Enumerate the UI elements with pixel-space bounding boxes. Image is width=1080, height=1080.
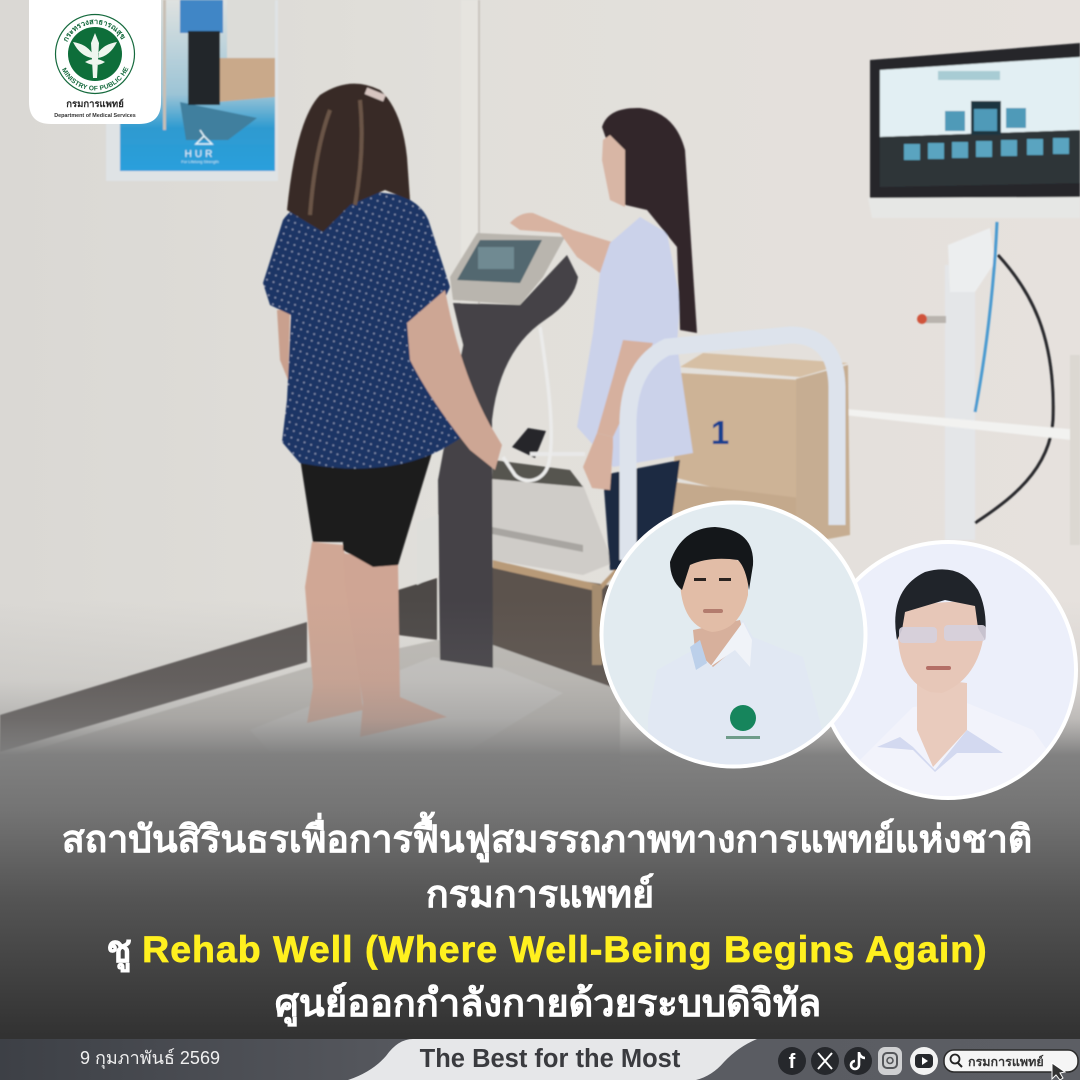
wooden cabinet — [673, 353, 850, 545]
left arm — [277, 310, 290, 380]
ministry seal: กระทรวงสาธารณสุข — [64, 19, 126, 42]
body scanner machine — [438, 233, 578, 668]
baseboard — [0, 622, 307, 752]
shorts — [300, 453, 432, 567]
logo label thai: กรมการแพทย์ — [66, 98, 124, 110]
cursor icon — [1052, 1063, 1065, 1080]
footer bar — [0, 1039, 1080, 1080]
portrait: left — [600, 500, 870, 770]
caduceus emblem — [73, 33, 117, 78]
staff in white uniform — [510, 108, 697, 570]
headline line 3: ชู Rehab Well (Where Well-Being Begins Again) — [106, 928, 988, 970]
social icons — [778, 1047, 1078, 1080]
patient in blue blouse — [263, 84, 502, 737]
portrait: right — [818, 540, 1080, 805]
icon: instagram — [878, 1047, 902, 1075]
headline line 1: สถาบันสิรินธรเพื่อการฟื้นฟูสมรรถภาพทางการแพทย์แห่งชาติ — [62, 818, 1032, 860]
shirt logo — [730, 705, 756, 731]
monitor stand and cables — [835, 222, 1080, 545]
footer white banner — [348, 1039, 757, 1080]
search box: กรมการแพทย์ — [968, 1054, 1044, 1069]
floor — [0, 640, 620, 800]
hair — [287, 84, 410, 232]
headline line 4: ศูนย์ออกกำลังกายด้วยระบบดิจิทัล — [275, 983, 821, 1025]
icon: tiktok — [844, 1047, 872, 1075]
icon: facebook — [778, 1047, 806, 1075]
icon: x — [811, 1047, 839, 1075]
wall poster: For Lifelong Strength — [181, 159, 219, 164]
logo label english: Department of Medical Services — [54, 113, 136, 119]
headline line 2: กรมการแพทย์ — [426, 873, 654, 915]
ministry seal — [54, 14, 136, 94]
blouse — [263, 190, 462, 469]
dark bottom gradient — [0, 600, 1080, 1040]
legs — [305, 542, 363, 723]
right arm — [407, 290, 502, 470]
footer slogan: The Best for the Most — [420, 1045, 681, 1073]
wall monitor — [868, 43, 1080, 218]
wall pillar edge — [461, 0, 480, 480]
search box — [944, 1050, 1078, 1080]
footer date: 9 กุมภาพันธ์ 2569 — [80, 1048, 220, 1069]
printer and desk — [417, 428, 617, 665]
icon: facebook: f — [789, 1051, 796, 1073]
poster brand: HUR — [185, 149, 215, 160]
headline — [62, 812, 1032, 1027]
wall poster — [106, 0, 278, 181]
logo card — [29, 0, 161, 124]
cabinet number: 1 — [711, 414, 729, 451]
white handrail — [628, 335, 837, 560]
scale platform — [250, 657, 563, 752]
icon: youtube — [910, 1047, 938, 1075]
